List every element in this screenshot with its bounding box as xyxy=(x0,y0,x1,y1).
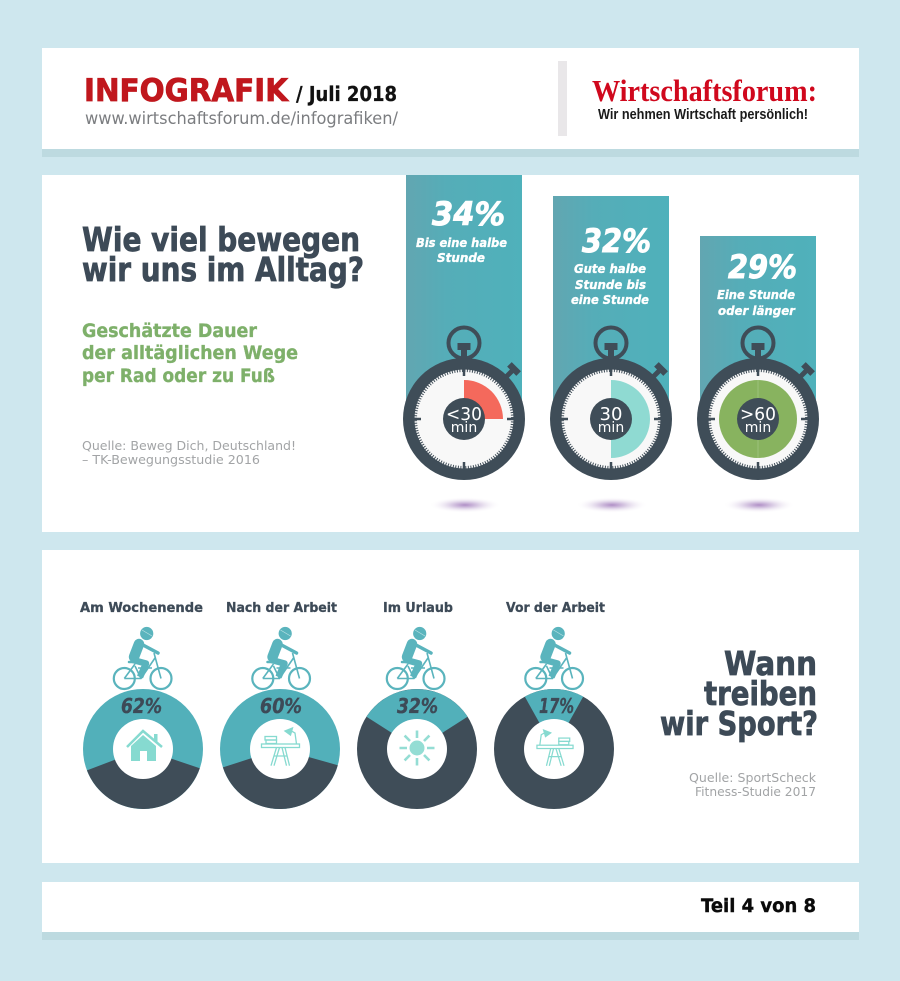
donut: Nach der Arbeit 60 percent xyxy=(220,600,340,809)
stopwatch: under 30 min: min xyxy=(451,420,477,436)
donut: Im Urlaub 32 percent xyxy=(357,600,477,809)
stopwatch: 30 min: 30 xyxy=(600,404,622,425)
text: Teil 4 von 8: Teil 4 von 8 xyxy=(701,895,816,917)
heading: Wann treiben wir Sport?: treiben xyxy=(704,674,817,713)
logo: Wirtschaftsforum xyxy=(592,73,817,123)
subheading: Geschätzte Dauer xyxy=(82,320,298,387)
stat: 29 percent: oder länger xyxy=(718,303,796,318)
shadow xyxy=(429,497,501,513)
subheading: Geschätzte Dauer: der alltäglichen Wege xyxy=(82,342,298,364)
stat: 29 percent: Eine Stunde xyxy=(717,287,795,302)
source: TK study xyxy=(82,439,296,467)
source: SportScheck: Quelle: SportScheck xyxy=(689,771,816,785)
icon: desk mirrored xyxy=(537,730,573,766)
stat: 34 percent: Bis eine halbe xyxy=(416,235,507,250)
stat: 29 percent: 29% xyxy=(728,248,797,286)
shadow xyxy=(576,497,648,513)
subheading: Geschätzte Dauer: Geschätzte Dauer xyxy=(82,320,258,342)
heading: Wann treiben wir Sport? xyxy=(660,644,818,743)
heading: Wie viel bewegen wir uns im Alltag? xyxy=(82,220,364,289)
source: TK study: Quelle: Beweg Dich, Deutschland! xyxy=(82,439,296,453)
stopwatch: 30 min xyxy=(550,328,672,480)
stopwatch: over 60 min: min xyxy=(745,420,771,436)
donut: Am Wochenende 62 percent: Am Wochenende xyxy=(80,600,203,616)
stat: 32 percent: 32% xyxy=(582,222,651,260)
donut: Nach der Arbeit 60 percent: Nach der Arbeit xyxy=(226,600,338,616)
stat: 32 percent: Gute halbe xyxy=(574,261,646,276)
donut: Am Wochenende 62 percent xyxy=(80,600,203,809)
stat: 29 percent xyxy=(697,236,819,513)
donut: Am Wochenende 62 percent: 62% xyxy=(121,694,162,718)
panel: Wann treiben wir Sport xyxy=(42,550,859,863)
source: SportScheck: Fitness-Studie 2017 xyxy=(695,785,816,799)
stopwatch: over 60 min xyxy=(697,328,819,480)
heading: Wann treiben wir Sport?: wir Sport? xyxy=(660,704,818,743)
stat: 32 percent: Stunde bis xyxy=(575,277,646,292)
donut: Nach der Arbeit 60 percent: 60% xyxy=(260,694,302,718)
stat: 32 percent: eine Stunde xyxy=(571,292,649,307)
donut: Im Urlaub 32 percent: Im Urlaub xyxy=(383,600,453,616)
heading: Wie viel bewegen wir uns im Alltag?: wir uns im Alltag? xyxy=(82,250,364,289)
shadow xyxy=(723,497,795,513)
heading: INFOGRAFIK: INFOGRAFIK xyxy=(84,73,289,109)
donut: Im Urlaub 32 percent: 32% xyxy=(397,694,438,718)
icon: desk xyxy=(262,728,300,766)
logo: Wirtschaftsforum: Wirtschaftsforum: xyxy=(592,73,817,108)
stat: 32 percent xyxy=(550,196,672,513)
stopwatch: 30 min: min xyxy=(598,420,624,436)
subheading: Geschätzte Dauer: per Rad oder zu Fuß xyxy=(82,365,275,387)
logo: Wirtschaftsforum: Wir nehmen Wirtschaft persönlich! xyxy=(598,107,808,123)
stopwatch: under 30 min: <30 xyxy=(446,404,482,425)
donut: Vor der Arbeit 17 percent: 17% xyxy=(539,694,574,718)
stat: 34 percent: Stunde xyxy=(437,250,485,265)
source: TK study: – TK-Bewegungsstudie 2016 xyxy=(82,453,260,467)
panel: header xyxy=(42,48,859,157)
heading: date: / Juli 2018 xyxy=(296,82,397,106)
icon: house xyxy=(127,731,162,761)
donut: Vor der Arbeit 17 percent xyxy=(494,600,614,809)
stopwatch: over 60 min: >60 xyxy=(740,404,776,425)
panel: footer xyxy=(42,882,859,940)
panel: Wie viel bewegen wir uns xyxy=(42,175,859,532)
source: SportScheck xyxy=(689,771,816,799)
heading: Wie viel bewegen wir uns im Alltag?: Wie viel bewegen xyxy=(82,220,360,259)
heading: Wann treiben wir Sport?: Wann xyxy=(724,644,817,683)
stat: 34 percent xyxy=(403,175,525,513)
stat: 34 percent: 34% xyxy=(432,195,505,233)
donut: Vor der Arbeit 17 percent: Vor der Arbeit xyxy=(506,600,605,616)
icon: sun xyxy=(400,730,434,766)
stopwatch: under 30 min xyxy=(403,328,525,480)
text: url: www.wirtschaftsforum.de/infografiken/ xyxy=(85,109,398,129)
